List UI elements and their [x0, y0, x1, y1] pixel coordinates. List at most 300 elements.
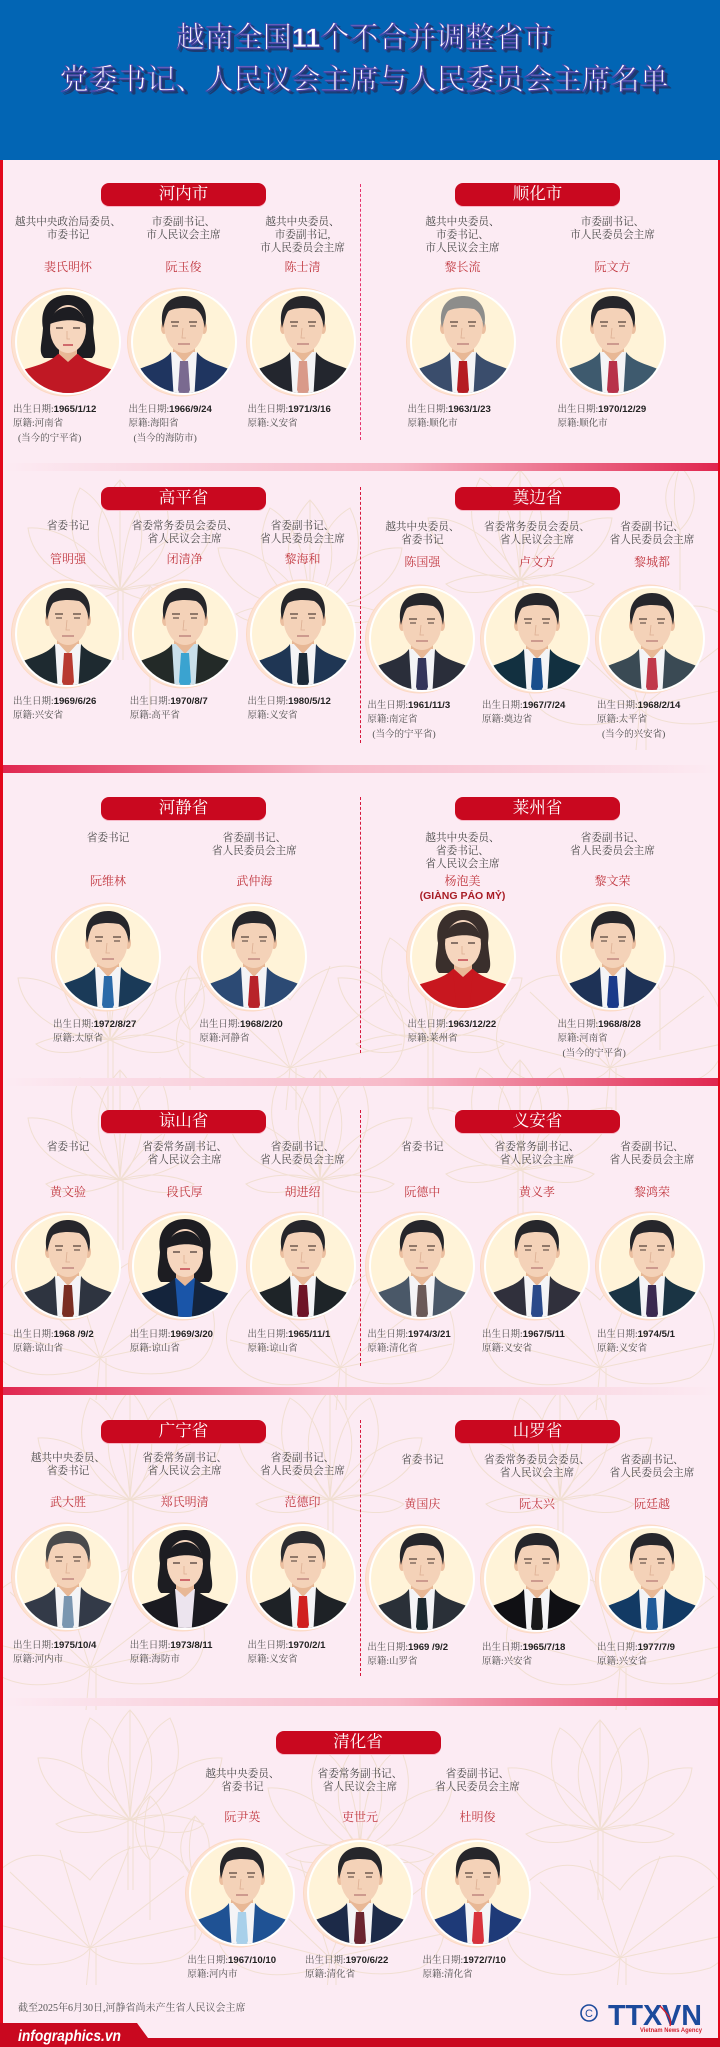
birth info: 出生日期:1967/10/10 [187, 1955, 276, 1966]
birth info [597, 1641, 712, 1670]
role: 省委书记 [47, 1142, 89, 1152]
birth info: (当今的海防市) [134, 434, 197, 444]
name: 黎城都 [634, 555, 670, 569]
role: 省人民委员会主席 [570, 846, 655, 856]
birth info: 原籍:谅山省 [130, 1344, 180, 1354]
birth info: 出生日期:1973/8/11 [130, 1640, 212, 1651]
birth info: 原籍:义安省 [248, 419, 298, 429]
birth info: (当今的宁平省) [372, 730, 436, 740]
person: 杨泡美 [402, 832, 522, 1064]
name: 阮尹英 [224, 1810, 260, 1824]
heading: 清化省: 清化省 [333, 1732, 383, 1751]
name: 胡进绍 [284, 1185, 320, 1199]
role: 省人民议会主席 [148, 1154, 222, 1166]
birth info [130, 1328, 245, 1357]
portrait [556, 288, 666, 396]
birth info: 出生日期:1975/10/4 [13, 1640, 96, 1651]
person: 闭清净 [128, 520, 238, 721]
person: 黎海和 [246, 520, 356, 721]
role [120, 1140, 250, 1166]
role: 省人民委员会主席 [435, 1782, 520, 1792]
birth info: 原籍:海防市 [130, 1655, 180, 1665]
portrait [480, 584, 590, 694]
birth info: 原籍:顺化市 [558, 419, 608, 429]
role: 省委书记 [87, 832, 129, 844]
birth info: 原籍:高平省 [130, 711, 180, 721]
role [587, 1140, 717, 1166]
role: 省委副书记、 [271, 1452, 334, 1464]
birth info: 出生日期:1968/2/20 [199, 1019, 283, 1030]
role: 省人民委员会主席 [260, 1466, 345, 1476]
birth info [408, 1018, 522, 1047]
name: 武仲海 [236, 874, 272, 888]
role [238, 1452, 368, 1478]
role: 省人民议会主席 [425, 858, 500, 870]
portrait [129, 1210, 241, 1322]
birth info: 出生日期:1969/3/20 [130, 1329, 213, 1340]
birth info: 出生日期:1968 /9/2 [13, 1329, 94, 1340]
name: 范德印 [284, 1495, 320, 1509]
heading: 河内市: 河内市 [159, 184, 208, 203]
name: 郑氏明清 [161, 1495, 209, 1509]
role [120, 1452, 250, 1478]
name: 黎海和 [284, 552, 320, 566]
birth info [248, 1328, 362, 1357]
role: 省委书记 [401, 534, 444, 546]
person: 阮廷越 [592, 1454, 712, 1686]
person: 段氏厚 [125, 1140, 245, 1372]
portrait [246, 580, 356, 688]
role [425, 216, 500, 254]
role: 省人民议会主席 [323, 1782, 397, 1792]
name: 黄义孝 [519, 1185, 555, 1199]
birth info: 出生日期:1969 /9/2 [367, 1642, 448, 1653]
birth info: 出生日期:1965/11/1 [248, 1329, 330, 1340]
portrait [186, 1837, 298, 1949]
divider strip 5 [3, 1698, 718, 1706]
birth info: 出生日期:1970/2/1 [248, 1640, 326, 1651]
birth info: (当今的宁平省) [562, 1049, 626, 1059]
birth info [482, 699, 597, 728]
person: 管明强 [11, 520, 121, 721]
name: 黎长流 [444, 260, 480, 274]
person: 黎城都 [592, 520, 712, 752]
name: 阮德中 [404, 1185, 440, 1199]
strip top [3, 463, 718, 471]
strip bottom [3, 765, 718, 773]
heading: 清化省 [276, 1731, 440, 1754]
name: 陈国强 [404, 555, 440, 569]
portrait [127, 288, 237, 396]
birth info [422, 1954, 538, 1983]
person: 陈国强 [365, 520, 475, 740]
birth info: 出生日期:1980/5/12 [248, 696, 331, 707]
role: 省人民委员会主席 [212, 846, 297, 856]
role: 省委书记 [401, 1142, 444, 1152]
name: 杨泡美 [444, 874, 480, 888]
name: 陈士清 [284, 260, 320, 274]
name: 武大胜 [50, 1495, 86, 1509]
title [59, 22, 672, 96]
birth info: 原籍:河南省 [558, 1034, 608, 1044]
birth info: 出生日期:1974/3/21 [367, 1329, 451, 1340]
role: 市人民议会主席 [146, 230, 221, 240]
birth info: 原籍:清化省 [305, 1970, 355, 1980]
role [472, 1140, 602, 1166]
logo: TTXVN [578, 2000, 708, 2036]
birth info: 原籍:义安省 [248, 711, 298, 721]
person: 杜明俊 [418, 1768, 538, 2000]
name: 裴氏明怀 [44, 260, 92, 274]
heading: 山罗省 [455, 1420, 620, 1443]
birth info [13, 696, 96, 721]
person: 阮太兴 [477, 1454, 597, 1686]
birth info: 原籍:海阳省 [128, 419, 179, 429]
role: 省委副书记、 [446, 1768, 509, 1780]
birth info [367, 700, 450, 740]
heading: 顺化市: 顺化市 [513, 184, 562, 203]
name: 阮玉俊 [165, 260, 202, 274]
person: 黎鸿荣 [592, 1140, 712, 1372]
birth info: 原籍:太原省 [53, 1034, 103, 1044]
person: 阮尹英 [182, 1768, 302, 2000]
birth info: 出生日期:1961/11/3 [367, 700, 450, 711]
birth info: 原籍:谅山省 [13, 1344, 63, 1354]
birth info [199, 1018, 314, 1047]
portrait [596, 583, 708, 695]
role: 省人民委员会主席 [610, 1468, 694, 1478]
role [472, 1454, 602, 1480]
heading: 谅山省 [101, 1110, 266, 1133]
role: 市人民议会主席 [425, 242, 500, 254]
role: 省委常务委员会委员、 [484, 522, 590, 532]
logo: TTXVN: TTXVN [608, 2000, 702, 2032]
name: 卢文方 [519, 555, 555, 569]
portrait [422, 1837, 534, 1949]
header band with title [0, 0, 720, 160]
person: 阮维林 [48, 832, 168, 1064]
role: 越共中央委员、 [205, 1768, 279, 1780]
birth info [13, 404, 96, 444]
birth info: 出生日期:1965/1/12 [13, 404, 96, 415]
role [587, 1454, 717, 1480]
role: 省委常务委员会委员、 [484, 1454, 590, 1466]
role: 省委常务副书记、 [142, 1142, 227, 1152]
divider strip 4 [3, 1387, 718, 1395]
birth info: 出生日期:1972/7/10 [422, 1955, 506, 1966]
birth info [13, 1639, 128, 1668]
person: 黎文荣 [552, 832, 672, 1064]
role [132, 520, 238, 544]
name: 阮廷越 [634, 1497, 670, 1511]
role: 越共中央委员、 [425, 216, 500, 228]
birth info: 出生日期:1977/7/9 [597, 1642, 675, 1653]
role [570, 216, 655, 240]
role: 省人民议会主席 [148, 1466, 222, 1476]
portrait [596, 1523, 708, 1635]
frame: right red edge [718, 160, 720, 2047]
person: 郑氏明清 [125, 1452, 245, 1684]
heading: 奠边省 [455, 487, 620, 510]
birth info [305, 1954, 420, 1983]
name: 管明强 [50, 552, 86, 566]
role [385, 520, 459, 546]
portrait [366, 1523, 478, 1635]
portrait [12, 1521, 124, 1633]
heading: 广宁省 [101, 1420, 266, 1443]
portrait [246, 288, 356, 396]
divider strip 3 [3, 1078, 718, 1086]
role [177, 1768, 307, 1794]
role: 省委常务委员会委员、 [132, 520, 238, 532]
heading: 莱州省: 莱州省 [513, 798, 562, 817]
birth info: 出生日期:1970/8/7 [130, 696, 208, 707]
birth info: 原籍:兴安省 [597, 1657, 647, 1667]
name: 黄国庆 [404, 1497, 440, 1511]
birth info: 出生日期:1969/6/26 [13, 696, 96, 707]
birth info [130, 1639, 245, 1668]
birth info: 原籍:南定省 [367, 715, 418, 725]
birth info: 出生日期:1970/12/29 [558, 404, 646, 415]
latin name: (GIÀNG PÁO MỶ) [420, 890, 505, 902]
role: 省人民委员会主席 [260, 1154, 345, 1166]
role: 省委副书记、 [223, 832, 286, 844]
birth info: 出生日期:1967/5/11 [482, 1329, 565, 1340]
role: 省人民委员会主席 [610, 534, 694, 546]
role: 省委书记 [221, 1782, 264, 1792]
heading: 河静省: 河静省 [159, 798, 208, 817]
role: 市委书记 [47, 230, 89, 240]
role: 省委副书记、 [620, 1454, 684, 1466]
name: 段氏厚 [167, 1185, 203, 1199]
role: 市委副书记, [275, 230, 330, 240]
birth info: 原籍:义安省 [482, 1344, 532, 1354]
role [412, 1768, 542, 1794]
role: 省委常务副书记、 [142, 1452, 227, 1464]
birth info [248, 1639, 362, 1668]
portrait [12, 1210, 124, 1322]
birth info [53, 1018, 168, 1047]
role: 市委书记、 [436, 230, 489, 240]
role: 省委副书记、 [620, 522, 684, 532]
name: 黄文验 [50, 1185, 86, 1199]
role: 市委副书记、 [581, 216, 644, 228]
birth info: 原籍:兴安省 [13, 711, 63, 721]
role: 省委常务副书记、 [495, 1142, 579, 1152]
portrait [481, 1210, 593, 1322]
footer bar with site tab [0, 2020, 720, 2047]
birth info [482, 1328, 597, 1357]
birth info: 原籍:兴安省 [482, 1657, 532, 1667]
birth info: 出生日期:1968/2/14 [597, 700, 680, 711]
name: 黎文荣 [594, 874, 630, 888]
portrait [406, 901, 518, 1013]
birth info [13, 1328, 128, 1357]
logo: TTXVN: Vietnam News Agency [640, 2027, 702, 2034]
birth info: 出生日期:1972/8/27 [53, 1019, 136, 1030]
portrait [11, 288, 121, 396]
role: 省委副书记、 [620, 1142, 684, 1152]
heading: 莱州省 [455, 797, 620, 820]
birth info: 出生日期:1974/5/1 [597, 1329, 675, 1340]
heading: 谅山省: 谅山省 [159, 1111, 208, 1130]
name: 阮太兴 [519, 1497, 555, 1511]
name: 吏世元 [342, 1810, 378, 1824]
portrait [304, 1837, 416, 1949]
person: 阮玉俊 [127, 216, 237, 444]
role [484, 520, 590, 546]
birth info: 原籍:义安省 [597, 1344, 647, 1354]
portrait [52, 901, 164, 1013]
birth info: 原籍:清化省 [367, 1344, 418, 1354]
portrait [246, 1521, 358, 1633]
birth info: 出生日期:1963/1/23 [408, 404, 491, 415]
birth info: 出生日期:1965/7/18 [482, 1642, 565, 1653]
birth info [367, 1328, 482, 1357]
person: 陈士清 [246, 216, 356, 429]
role: 越共中央委员、 [31, 1452, 105, 1464]
role [146, 216, 221, 240]
person: 阮德中 [362, 1140, 482, 1372]
name: 黎鸿荣 [634, 1185, 670, 1199]
person: 卢文方 [480, 520, 590, 725]
birth info [597, 699, 712, 742]
role: 省人民委员会主席 [260, 534, 345, 544]
role: 市人民委员会主席 [260, 242, 345, 254]
birth info [248, 696, 331, 721]
heading: 广宁省: 广宁省 [159, 1421, 208, 1440]
birth info: 原籍:河南省 [13, 419, 63, 429]
name: 阮维林 [90, 874, 126, 888]
role: 省人民议会主席 [500, 1154, 574, 1166]
role [398, 832, 528, 870]
role [189, 832, 319, 858]
birth info: (当今的宁平省) [18, 434, 81, 444]
person: 胡进绍 [242, 1140, 362, 1372]
portrait [365, 584, 475, 694]
portrait [556, 901, 668, 1013]
role: 省委副书记、 [271, 520, 334, 532]
role: 市人民委员会主席 [570, 230, 655, 240]
role: 省委书记 [47, 520, 89, 532]
birth info [248, 404, 331, 429]
birth info [408, 404, 491, 429]
role [260, 216, 345, 254]
birth info: 原籍:谅山省 [248, 1344, 298, 1354]
role: 越共中央委员、 [425, 832, 500, 844]
birth info [597, 1328, 712, 1357]
heading: 义安省 [455, 1110, 620, 1133]
role: 省委书记 [47, 1466, 89, 1476]
role: 省委常务副书记、 [318, 1768, 402, 1780]
person: 黄文验 [8, 1140, 128, 1372]
role [260, 520, 345, 544]
birth info: 原籍:河静省 [199, 1034, 250, 1044]
role [548, 832, 678, 858]
portrait [596, 1210, 708, 1322]
role: 省委副书记、 [271, 1142, 334, 1152]
role [587, 520, 717, 546]
birth info [128, 404, 212, 444]
birth info: 原籍:河内市 [13, 1655, 63, 1665]
birth info: 出生日期:1970/6/22 [305, 1955, 388, 1966]
portrait [406, 288, 516, 396]
role: 市委副书记、 [152, 216, 215, 228]
heading: 高平省 [101, 487, 266, 510]
birth info: 原籍:太平省 [597, 715, 647, 725]
person: 黎长流 [406, 216, 516, 429]
birth info [558, 1018, 672, 1061]
section divider strips [3, 463, 718, 773]
role: 省委副书记、 [581, 832, 644, 844]
person: 武大胜 [8, 1452, 128, 1684]
heading: 山罗省: 山罗省 [513, 1421, 562, 1440]
heading: 高平省: 高平省 [159, 488, 208, 507]
birth info [558, 404, 646, 429]
person: 黄义孝 [477, 1140, 597, 1372]
portrait [246, 1210, 358, 1322]
role: 越共中央政治局委员、 [15, 216, 121, 228]
birth info: 出生日期:1971/3/16 [248, 404, 331, 415]
role: 省人民议会主席 [148, 534, 222, 544]
name: 杜明俊 [459, 1810, 496, 1824]
birth info: 原籍:奠边省 [482, 715, 532, 725]
logo: TTXVN: C [585, 2008, 593, 2020]
portrait [128, 580, 238, 688]
role: 省委书记 [401, 1454, 444, 1466]
title: 党委书记、人民议会主席与人民委员会主席名单 [59, 64, 668, 96]
footnote: 截至2025年6月30日,河静省尚未产生省人民议会主席 [18, 2003, 246, 2014]
heading: 顺化市 [455, 183, 620, 206]
birth info: 出生日期:1966/9/24 [128, 404, 212, 415]
role [15, 216, 121, 240]
birth info: 出生日期:1968/8/28 [558, 1019, 641, 1030]
heading: 义安省: 义安省 [513, 1111, 562, 1130]
person: 黄国庆 [362, 1454, 482, 1686]
birth info [367, 1641, 482, 1670]
heading: 河内市 [101, 183, 266, 206]
role: 越共中央委员、 [385, 522, 459, 532]
heading: 河静省 [101, 797, 266, 820]
role: 省人民议会主席 [500, 534, 574, 546]
portrait [11, 580, 121, 688]
role: 省人民议会主席 [500, 1468, 574, 1478]
role: 省委书记、 [436, 846, 489, 856]
frame: left red edge [0, 160, 3, 2047]
role [295, 1768, 425, 1794]
heading: 奠边省: 奠边省 [513, 488, 562, 507]
birth info: 原籍:顺化市 [408, 419, 458, 429]
role [3, 1452, 133, 1478]
role: 越共中央委员、 [265, 216, 340, 228]
name: 闭清净 [167, 552, 203, 566]
footer bar with site tab: infographics.vn [18, 2028, 121, 2045]
birth info [187, 1954, 302, 1983]
birth info: 原籍:河内市 [187, 1970, 238, 1980]
person: 范德印 [242, 1452, 362, 1684]
birth info: 原籍:清化省 [422, 1970, 473, 1980]
birth info: 原籍:山罗省 [367, 1657, 418, 1667]
birth info [130, 696, 208, 721]
person: 武仲海 [194, 832, 314, 1064]
name: 阮文方 [594, 260, 630, 274]
portrait [129, 1521, 241, 1633]
portrait [366, 1210, 478, 1322]
birth info: 原籍:莱州省 [408, 1034, 458, 1044]
birth info [482, 1641, 597, 1670]
person: 裴氏明怀 [11, 216, 121, 444]
person: 阮文方 [556, 216, 666, 429]
